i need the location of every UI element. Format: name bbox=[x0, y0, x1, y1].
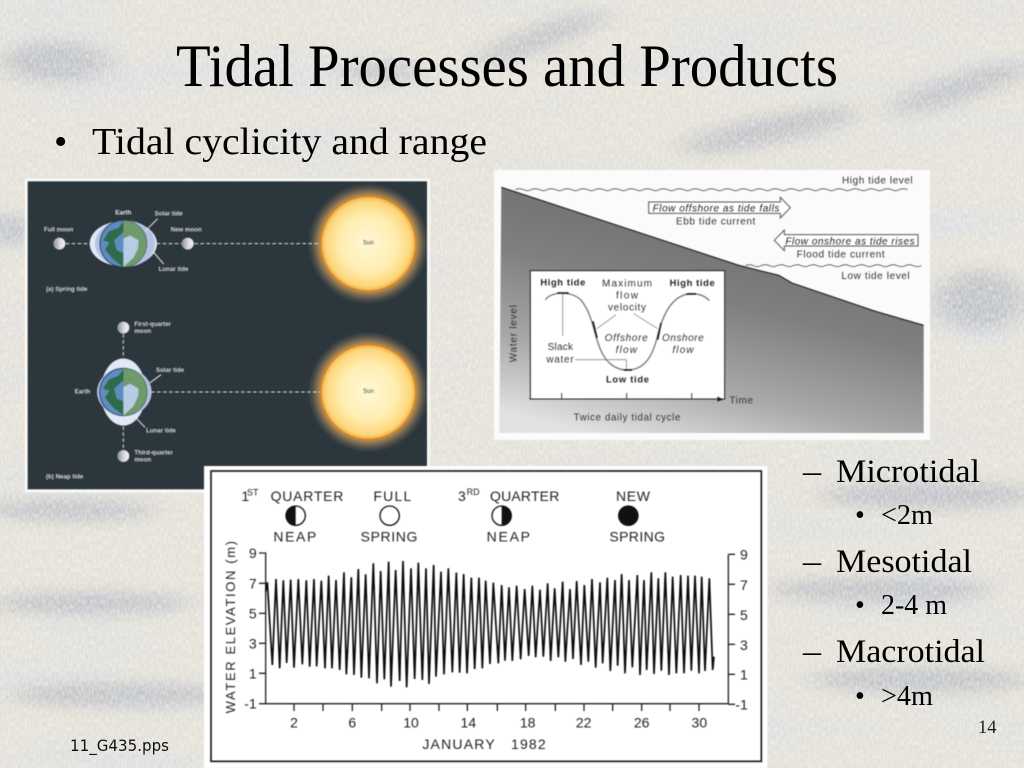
inset: twice daily tidal cycle chart: water bbox=[545, 354, 574, 365]
axes and ticks bbox=[259, 552, 735, 711]
neap tide: earth with tidal bulges: Earth bbox=[75, 388, 91, 395]
inset: twice daily tidal cycle chart: High tide bbox=[670, 278, 715, 288]
date axis labels bbox=[290, 714, 707, 730]
left axis labels: 1 bbox=[249, 665, 257, 681]
full moon bbox=[44, 227, 74, 250]
range: microtidal: Microtidal bbox=[836, 454, 980, 490]
third-quarter moon bbox=[117, 449, 174, 464]
moon phase: first quarter neap bbox=[241, 488, 343, 545]
flood tide arrow: Flow onshore as tide rises bbox=[785, 236, 915, 247]
moon phase: third quarter neap: NEAP bbox=[487, 529, 530, 545]
value: over 4 m: >4m bbox=[881, 681, 933, 712]
moon phase: first quarter neap: 1 bbox=[241, 488, 249, 504]
low tide level: Low tide level bbox=[841, 271, 910, 282]
panel: ebb and flood tide diagram bbox=[494, 170, 930, 440]
neap tide: lunar tide label: Lunar tide bbox=[146, 427, 176, 434]
time axis label: Time bbox=[729, 396, 753, 407]
panel: spring and neap tide diagram bbox=[24, 178, 430, 493]
inset: twice daily tidal cycle chart: flow bbox=[672, 345, 694, 356]
inset: twice daily tidal cycle chart: Onshore bbox=[662, 333, 704, 344]
range: macrotidal: Macrotidal bbox=[836, 634, 985, 670]
neap tide: earth with tidal bulges bbox=[75, 358, 152, 426]
right axis labels: 3 bbox=[740, 637, 748, 653]
panel: January 1982 water elevation chart bbox=[203, 465, 768, 768]
tide elevation curve bbox=[266, 561, 714, 687]
date axis title: 1982 bbox=[511, 736, 546, 752]
new moon: New moon bbox=[171, 227, 202, 234]
moon phase: new spring: NEW bbox=[616, 488, 651, 504]
neap tide: alignment lines bbox=[123, 334, 320, 450]
range: mesotidal: Mesotidal bbox=[836, 544, 972, 580]
value: under 2 m bbox=[855, 500, 933, 531]
neap tide caption: (b) Neap tide bbox=[46, 474, 84, 481]
left axis labels: 3 bbox=[249, 635, 257, 651]
spring tide: alignment line bbox=[66, 242, 320, 245]
inset: twice daily tidal cycle chart: velocity bbox=[608, 302, 646, 313]
moon phase: new spring: SPRING bbox=[609, 529, 665, 545]
date axis labels: 26 bbox=[634, 714, 650, 730]
date axis title bbox=[422, 736, 546, 752]
shore wedge bbox=[499, 187, 924, 433]
moon phase: third quarter neap: QUARTER bbox=[490, 488, 559, 504]
bullet: tidal cyclicity and range: • bbox=[54, 121, 67, 163]
right axis labels: 7 bbox=[740, 577, 748, 593]
high tide level: High tide level bbox=[842, 176, 913, 187]
inset: twice daily tidal cycle chart bbox=[529, 271, 725, 402]
left axis labels: -1 bbox=[244, 696, 257, 712]
value: over 4 m: • bbox=[855, 681, 865, 712]
ebb tide arrow: Flow offshore as tide falls bbox=[653, 203, 779, 214]
flood tide arrow: Flood tide current bbox=[797, 249, 885, 260]
bullet: tidal cyclicity and range: Tidal cyclicity and range bbox=[92, 121, 487, 163]
date axis labels: 18 bbox=[520, 714, 536, 730]
right axis labels bbox=[735, 546, 748, 712]
spring tide caption: (a) Spring tide bbox=[46, 286, 88, 293]
moon phase: full spring: SPRING bbox=[361, 529, 417, 545]
left axis labels: 7 bbox=[249, 575, 257, 591]
moon phase: third quarter neap: 3 bbox=[458, 488, 466, 504]
moon phase: first quarter neap: QUARTER bbox=[271, 488, 343, 504]
full moon: Full moon bbox=[44, 227, 74, 234]
value: 2-4 m: • bbox=[855, 590, 865, 621]
right axis labels: 1 bbox=[740, 666, 748, 682]
left axis labels bbox=[244, 545, 257, 712]
spring tide: earth with tidal bulges: Earth bbox=[115, 210, 132, 217]
value: under 2 m: • bbox=[855, 500, 865, 531]
spring tide: lunar tide label bbox=[153, 252, 189, 273]
inset: twice daily tidal cycle chart: flow bbox=[616, 345, 638, 356]
moon phase: full spring: FULL bbox=[373, 488, 412, 504]
third-quarter moon: moon bbox=[134, 457, 151, 464]
water level axis label: Water level bbox=[508, 305, 519, 362]
neap tide: sun: Sun bbox=[363, 389, 374, 395]
new moon bbox=[171, 227, 202, 250]
spring tide: solar tide label bbox=[146, 210, 183, 231]
left axis labels: 5 bbox=[249, 605, 257, 621]
first-quarter moon bbox=[117, 321, 172, 335]
moon phase: third quarter neap: RD bbox=[467, 487, 480, 497]
spring tide: sun bbox=[308, 183, 429, 304]
date axis labels: 6 bbox=[348, 714, 356, 730]
page number: 14 bbox=[978, 718, 996, 738]
inset: twice daily tidal cycle chart: Low tide bbox=[606, 375, 649, 385]
neap tide: solar tide label: Solar tide bbox=[156, 367, 185, 374]
date axis labels: 22 bbox=[576, 714, 592, 730]
moon phase: new spring bbox=[609, 488, 665, 545]
value: under 2 m: <2m bbox=[881, 500, 933, 531]
date axis labels: 10 bbox=[403, 714, 419, 730]
value: over 4 m bbox=[855, 681, 933, 712]
moon phase: first quarter neap: NEAP bbox=[273, 529, 316, 545]
moon phase: first quarter neap: ST bbox=[247, 488, 259, 498]
spring tide: sun: Sun bbox=[363, 241, 374, 247]
range: mesotidal: – bbox=[802, 544, 822, 580]
date axis labels: 30 bbox=[692, 714, 707, 730]
right axis labels: -1 bbox=[735, 696, 748, 712]
neap tide: lunar tide label bbox=[137, 419, 176, 434]
moon phase: full spring bbox=[361, 488, 417, 545]
right axis labels: 9 bbox=[740, 546, 748, 562]
first-quarter moon: moon bbox=[134, 328, 151, 335]
first-quarter moon: First-quarter bbox=[134, 321, 172, 328]
inset: twice daily tidal cycle chart: Maximum bbox=[602, 278, 652, 289]
file name footer: 11_G435.pps bbox=[70, 736, 169, 756]
left axis labels: 9 bbox=[249, 545, 257, 561]
value: 2-4 m: 2-4 m bbox=[881, 590, 947, 621]
inset: twice daily tidal cycle chart: High tide bbox=[540, 277, 585, 287]
spring tide: solar tide label: Solar tide bbox=[155, 210, 183, 217]
range: microtidal: – bbox=[802, 454, 822, 490]
moon phase: third quarter neap bbox=[458, 487, 559, 545]
date axis labels: 14 bbox=[461, 714, 476, 730]
y axis title: WATER ELEVATION (m) bbox=[223, 541, 238, 713]
spring tide: earth with tidal bulges bbox=[90, 210, 157, 267]
tidal cycle caption: Twice daily tidal cycle bbox=[574, 412, 680, 423]
third-quarter moon: Third-quarter bbox=[134, 449, 174, 456]
inset: twice daily tidal cycle chart: Slack bbox=[548, 342, 574, 353]
inset: twice daily tidal cycle chart: flow bbox=[616, 290, 639, 301]
flood tide arrow bbox=[774, 230, 918, 260]
date axis title: JANUARY bbox=[422, 736, 495, 752]
right axis labels: 5 bbox=[740, 607, 748, 623]
inset: twice daily tidal cycle chart: Offshore bbox=[605, 333, 648, 344]
spring tide: lunar tide label: Lunar tide bbox=[159, 266, 189, 273]
neap tide: solar tide label bbox=[150, 367, 185, 383]
date axis labels: 2 bbox=[290, 714, 298, 730]
title: Tidal Processes and Products bbox=[176, 33, 838, 99]
neap tide: sun bbox=[308, 331, 429, 453]
ebb tide arrow: Ebb tide current bbox=[676, 217, 756, 228]
range: macrotidal: – bbox=[802, 634, 822, 670]
ebb tide arrow bbox=[649, 197, 790, 228]
